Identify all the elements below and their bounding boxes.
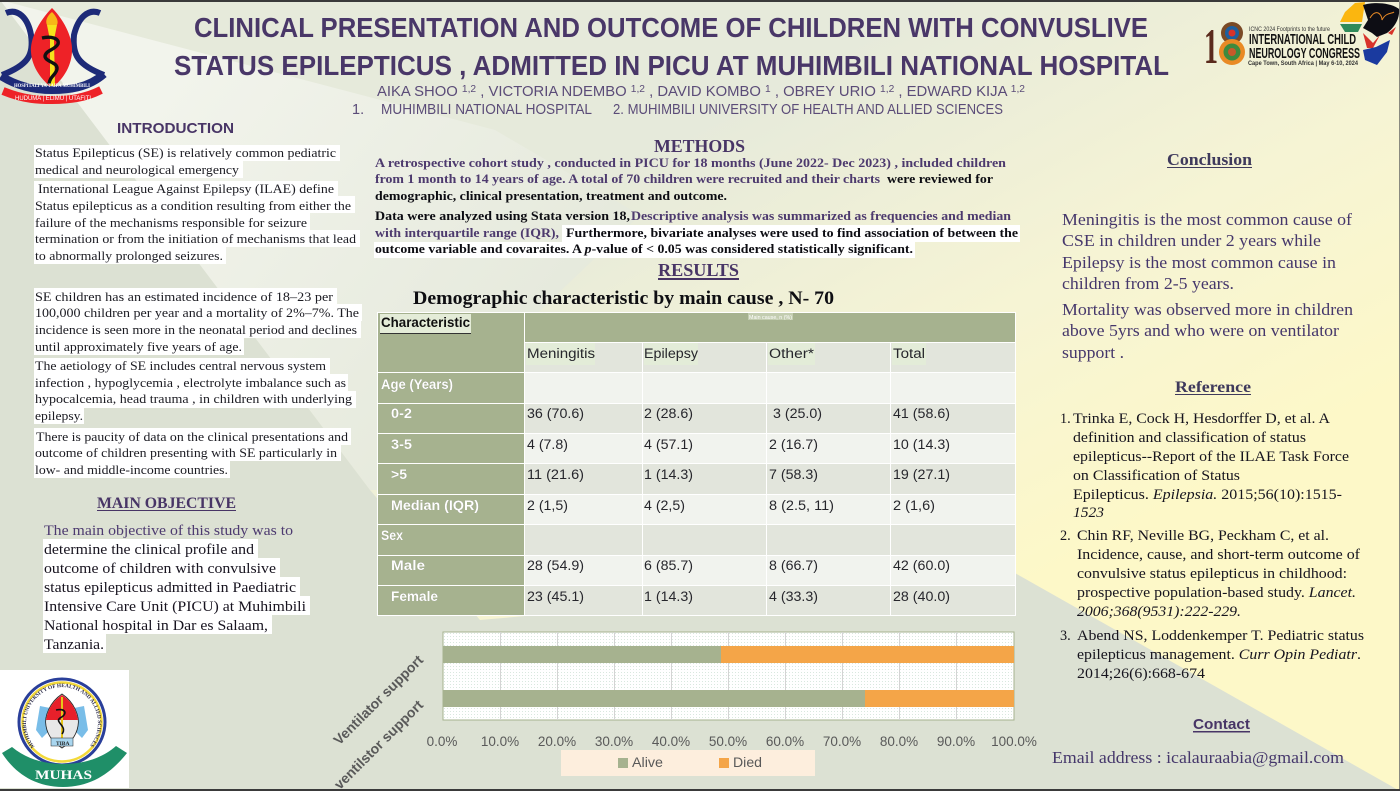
table values: 42 (60.0) (893, 558, 950, 573)
affiliations (352, 102, 1003, 118)
table row labels: Median (IQR) (391, 498, 479, 513)
text block: incidence and aetiology: The aetiology of SE includes central nervous system (35, 358, 326, 373)
table values: 2 (1,6) (893, 498, 935, 513)
table values: 23 (45.1) (527, 589, 584, 604)
table values: 4 (57.1) (644, 437, 693, 452)
table values: 6 (85.7) (644, 558, 693, 573)
panel: methods (374, 136, 1020, 258)
reference 2: 2006;368(9531):222-229. (1077, 604, 1241, 620)
text block: methods: from 1 month to 14 years of age. A total of 70 children were recruited and their charts (375, 172, 880, 186)
text block: objective: outcome of children with convulsive (44, 561, 276, 577)
text block: incidence and aetiology: until approximately five years of age. (35, 339, 242, 354)
text block: objective: National hospital in Dar es Salaam, (44, 618, 268, 634)
reference 1: on Classification of Status (1073, 468, 1240, 484)
text block: conclusion: above 5yrs and who were on ventilator (1062, 321, 1339, 340)
authors: 1,2 (880, 84, 895, 95)
table header: Meningitis (527, 346, 595, 361)
text block: methods: A retrospective cohort study , conducted in PICU for 18 months (June 2022- Dec 2023) , included children (375, 156, 1006, 170)
table values: 2 (1,5) (527, 498, 568, 513)
table values: 8 (2.5, 11) (769, 498, 834, 513)
panel: reference (1060, 379, 1364, 682)
table values: 4 (2,5) (644, 498, 685, 513)
text block: objective (43, 523, 310, 653)
authors: , VICTORIA NDEMBO (476, 84, 631, 100)
text block: methods: outcome variable and covaraites. A p-value of < 0.05 was considered statistically significant. (375, 242, 913, 256)
authors: 1 (765, 84, 771, 95)
logo: MUHAS: MUHIMBILI UNIVERSITY OF HEALTH AND ALLIED SCIENCES (22, 684, 102, 749)
text block: conclusion: Meningitis is the most common cause of (1062, 210, 1352, 229)
panel: introduction (34, 120, 362, 478)
axis labels: percent: 50.0% (709, 734, 747, 749)
text block: objective: The main objective of this study was to (44, 523, 293, 539)
reference 3 (1060, 628, 1364, 682)
table values: 2 (16.7) (769, 437, 818, 452)
text block: incidence and aetiology: incidence is seen more in the neonatal period and declines (35, 322, 357, 337)
text block: incidence and aetiology: SE children has an estimated incidence of 18–23 per (35, 289, 334, 304)
table row labels: 0-2 (391, 406, 412, 421)
table header: Other* (769, 346, 815, 361)
table: demographic characteristics (377, 312, 1016, 616)
panel: main objective (43, 495, 310, 653)
bar: no ventilator support (443, 690, 1014, 707)
legend (561, 750, 815, 776)
axis labels: percent: 80.0% (880, 734, 918, 749)
text block: incidence and aetiology: infection , hypoglycemia , electrolyte imbalance such as (35, 375, 346, 390)
reference 3: 3. (1060, 628, 1071, 644)
text block: definition: to abnormally prolonged seizures. (35, 248, 223, 263)
text block: objective: Intensive Care Unit (PICU) at Muhimbili (44, 599, 306, 615)
text block: definition: Status epilepticus as a condition resulting from either the (35, 198, 351, 213)
table values: 1 (14.3) (644, 467, 693, 482)
table row labels: 3-5 (391, 437, 413, 452)
authors: , DAVID KOMBO (645, 84, 765, 100)
axis labels: percent: 90.0% (937, 734, 975, 749)
text block: incidence and aetiology: low- and middle-income countries. (35, 462, 228, 477)
table header: Epilepsy (644, 346, 698, 361)
text block: conclusion: Epilepsy is the most common cause in (1062, 253, 1337, 272)
text block: definition: medical and neurological emergency (35, 162, 240, 177)
bar: ventilator support (443, 646, 1014, 663)
reference 1: epilepticus--Report of the ILAE Task Force (1073, 449, 1349, 465)
table values: 28 (54.9) (527, 558, 584, 573)
text block: incidence and aetiology: 100,000 children per year and a mortality of 2%–7%. The (35, 305, 359, 320)
table values: 8 (66.7) (769, 558, 818, 573)
table values: 4 (7.8) (527, 437, 568, 452)
text block: objective: Tanzania. (44, 637, 104, 653)
text block: methods: Furthermore, bivariate analyses were used to find association of between the (566, 226, 1018, 240)
text block: objective: status epilepticus admitted in Paediatric (44, 580, 296, 596)
reference 2: 2. (1060, 528, 1071, 544)
table values: 28 (40.0) (893, 589, 950, 604)
reference 2: Incidence, cause, and short-term outcome of (1077, 547, 1360, 563)
affiliations: MUHIMBILI NATIONAL HOSPITAL (381, 102, 592, 118)
table header: Characteristic (381, 315, 470, 330)
table values: 36 (70.6) (527, 406, 584, 421)
axis labels: categories (315, 652, 426, 791)
axis labels: percent: 20.0% (538, 734, 576, 749)
legend: Died (733, 755, 762, 770)
axis labels: percent: 0.0% (427, 734, 457, 749)
table values: 1 (14.3) (644, 589, 693, 604)
heading: contact: Contact (1193, 716, 1250, 733)
reference 2: convulsive status epilepticus in childhood: (1077, 566, 1347, 582)
affiliations: 1. (352, 102, 364, 118)
authors: 1,2 (462, 84, 477, 95)
text block: incidence and aetiology: There is paucity of data on the clinical presentations and (36, 429, 349, 444)
panel: conclusion (1062, 150, 1354, 362)
heading: reference: Reference (1175, 379, 1251, 396)
text block: conclusion: CSE in children under 2 years while (1062, 231, 1321, 250)
axis labels: percent: 60.0% (766, 734, 804, 749)
table values (527, 406, 950, 604)
heading: main objective: MAIN OBJECTIVE (97, 495, 236, 512)
authors: 1,2 (1011, 84, 1025, 95)
axis labels: percent: 40.0% (652, 734, 690, 749)
table values: 19 (27.1) (893, 467, 950, 482)
logo: MUHAS (0, 670, 129, 788)
table values: 2 (28.6) (644, 406, 693, 421)
logo: Muhimbili National Hospital: HOSPITALI YA TAIFA MUHIMBILI (14, 83, 90, 89)
title: CLINICAL PRESENTATION AND OUTCOME OF CHILDREN WITH CONVUSLIVE (194, 12, 1148, 43)
table row labels: Female (391, 589, 438, 604)
table row labels: Sex (381, 528, 403, 543)
email address: Email address : icalauraabia@gmail.com (1052, 748, 1344, 767)
table row labels: Age (Years) (381, 377, 453, 392)
reference 1: 1523 (1073, 505, 1104, 521)
logo: International Child Neurology Congress: 1 (1204, 18, 1218, 74)
text block: definition: Status Epilepticus (SE) is relatively common pediatric (35, 145, 336, 160)
logo: International Child Neurology Congress (1204, 2, 1399, 74)
table values: 7 (58.3) (769, 467, 818, 482)
text block: incidence and aetiology: epilepsy. (35, 408, 83, 423)
table heading: Demographic characteristic by main cause , N- 70 (413, 288, 834, 309)
heading: methods: METHODS (654, 136, 745, 156)
table header (380, 313, 926, 365)
text block: methods: Descriptive analysis was summarized as frequencies and median (631, 209, 1011, 223)
reference 3: Abend NS, Loddenkemper T. Pediatric status (1077, 628, 1364, 644)
axis labels: percent: 100.0% (991, 734, 1037, 749)
text block: incidence and aetiology: hypocalcemia, head trauma , in children with underlying (35, 391, 353, 406)
text block: definition: International League Against Epilepsy (ILAE) define (38, 181, 334, 196)
logo: International Child Neurology Congress: Cape Town, South Africa | May 6-10, 2024 (1248, 60, 1358, 67)
table row labels (381, 377, 479, 604)
text block: methods: Data were analyzed using Stata version 18, (375, 209, 630, 223)
table header: Total (893, 346, 925, 361)
logo: MUHAS: TIBA (56, 741, 69, 747)
text block: conclusion: Mortality was observed more in children (1062, 300, 1354, 319)
axis labels: percent: 70.0% (823, 734, 861, 749)
logo: International Child Neurology Congress: ICNC 2024 Footprints to the future (1249, 27, 1331, 33)
table values: 11 (21.6) (527, 467, 584, 482)
text block: methods (374, 156, 1020, 258)
authors: , OBREY URIO (771, 84, 880, 100)
text block: conclusion: children from 2-5 years. (1062, 274, 1234, 293)
table values: 3 (25.0) (773, 406, 822, 421)
axis labels: percent: 30.0% (595, 734, 633, 749)
axis labels: percent (427, 734, 1037, 749)
authors: AIKA SHOO (377, 84, 456, 100)
axis labels: categories: Ventilator support (330, 652, 426, 748)
heading: conclusion: Conclusion (1167, 150, 1253, 169)
logo: Muhimbili National Hospital (1, 8, 104, 102)
text block: methods: demographic, clinical presentation, treatment and outcome. (375, 189, 727, 203)
title (174, 12, 1169, 81)
reference 1: Epilepticus. Epilepsia. 2015;56(10):1515- (1073, 487, 1342, 503)
authors: , EDWARD KIJA (894, 84, 1011, 100)
reference 2: prospective population-based study. Lancet. (1077, 585, 1356, 601)
text block: definition (34, 145, 360, 264)
logo: Muhimbili National Hospital: HUDUMA | ELIMU | UTAFITI (15, 96, 91, 102)
text block: conclusion (1062, 210, 1354, 362)
reference 1: definition and classification of status (1073, 430, 1306, 446)
reference 3: epilepticus management. Curr Opin Pediatr . (1077, 647, 1361, 663)
title: STATUS EPILEPTICUS , ADMITTED IN PICU AT MUHIMBILI NATIONAL HOSPITAL (174, 50, 1169, 81)
text block: definition: failure of the mechanisms responsible for seizure (35, 215, 307, 230)
axis labels: percent: 10.0% (481, 734, 519, 749)
panel: contact (1052, 716, 1344, 767)
table header: Main cause, n (%) (749, 315, 792, 321)
reference 1: Trinka E, Cock H, Hesdorffer D, et al. A (1073, 411, 1331, 427)
bar chart: ventilator support outcome (315, 632, 1037, 791)
table values: 10 (14.3) (893, 437, 950, 452)
legend: Alive (632, 755, 663, 770)
affiliations: 2. MUHIMBILI UNIVERSITY OF HEALTH AND ALLIED SCIENCES (613, 102, 1003, 118)
table row labels: Male (391, 558, 426, 573)
heading: results: RESULTS (658, 260, 739, 280)
table row labels: >5 (391, 467, 407, 482)
reference 2: Chin RF, Neville BG, Peckham C, et al. (1077, 528, 1329, 544)
table values: 41 (58.6) (893, 406, 950, 421)
authors: 1,2 (631, 84, 645, 95)
text block: definition: termination or from the initiation of mechanisms that lead (35, 231, 357, 246)
text block: methods: with interquartile range (IQR), (375, 226, 559, 240)
reference 1: 1. (1060, 411, 1071, 427)
reference 1 (1060, 411, 1349, 521)
table values: 4 (33.3) (769, 589, 818, 604)
text block: objective: determine the clinical profile and (44, 542, 255, 558)
reference 3: 2014;26(6):668-674 (1077, 666, 1205, 682)
text block: incidence and aetiology (34, 288, 362, 478)
text block: methods: were reviewed for (887, 172, 993, 186)
text block: incidence and aetiology: outcome of children presenting with SE particularly in (35, 445, 338, 460)
logo: MUHAS: MUHAS (35, 767, 92, 782)
text block: conclusion: support . (1062, 343, 1124, 362)
heading: introduction: INTRODUCTION (117, 120, 234, 137)
reference 2 (1060, 528, 1360, 620)
